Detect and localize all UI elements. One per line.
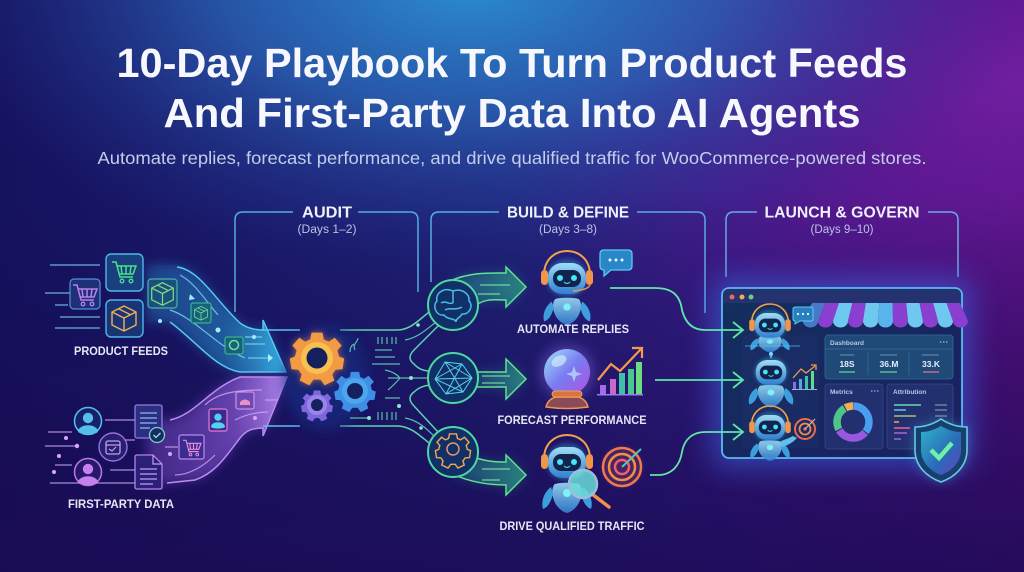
green flow arrow: bottom [452,455,526,495]
product feeds flow arrow [45,265,286,372]
icon: window growth chart [792,365,817,390]
icon: small tile [225,337,243,354]
robot: window middle [749,352,793,408]
panel: metrics donut [825,384,883,449]
phase bracket: audit [235,204,418,312]
icon: user cyan [74,408,102,434]
panel: dashboard metrics: 36.M [880,359,898,369]
icon: chat bubble [600,250,632,276]
phase bracket: audit: AUDIT [302,204,352,222]
icon: purple cart [70,279,100,309]
connector lines: hub rails and branches [263,310,438,446]
icon tiles: first-party data [74,392,254,489]
icon: gear circle [428,427,478,477]
connector arrow: forecast to dashboard [655,372,743,388]
green flow arrow: middle [476,359,526,399]
icon tiles: product feeds [70,254,243,354]
label: drive qualified traffic: DRIVE QUALIFIED TRAFFIC [500,521,644,533]
panel: attribution bars: Attribution [893,389,926,396]
first-party data flow arrow [45,377,287,483]
label: forecast performance: FORECAST PERFORMANCE [498,415,647,427]
icon: document with check [135,405,164,442]
panel: metrics donut: Metrics [830,389,853,396]
panel: dashboard metrics: 18S [839,359,855,369]
icon: network circle [428,353,478,403]
icon: orange gear [290,333,344,385]
connector arrow: traffic to dashboard [650,424,743,475]
icon: small box [191,303,211,323]
icon: storefront awning [803,303,968,328]
connector arrow: replies to dashboard [610,288,743,338]
robot: window top [745,304,800,352]
icon: image tile [236,392,254,409]
icon: window target [795,419,815,439]
robot: automate replies [541,250,632,325]
green flow arrow: top [450,267,526,307]
subtitle: Automate replies, forecast performance, and drive qualified traffic for WooCommerce-powered stores. [98,148,926,168]
icon: chat bubble in window [793,307,813,324]
title: 10-Day Playbook To Turn Product Feeds [116,40,908,86]
icon: user pink [74,458,102,486]
robot: window bottom [749,406,797,461]
icon: target [602,447,642,487]
phase bracket: build and define: BUILD & DEFINE [507,204,629,222]
label: product feeds: PRODUCT FEEDS [74,346,168,358]
panel: dashboard window [722,288,962,461]
dashboard window glow [712,278,972,468]
icon: calendar [99,433,127,461]
panel: dashboard metrics: 33.K [922,359,941,369]
window dots [730,294,754,300]
panel: dashboard metrics [825,335,953,379]
circuit traces [350,322,436,438]
icon: growth chart [597,348,643,396]
phase bracket: launch and govern: LAUNCH & GOVERN [764,204,920,222]
icon: orange box [106,300,143,337]
phase bracket: audit: (Days 1–2) [298,224,357,236]
label: automate replies: AUTOMATE REPLIES [517,324,629,336]
phase bracket: launch and govern: (Days 9–10) [810,224,874,236]
icon: crystal ball [540,345,594,408]
icon: profile tile [209,409,227,431]
icon: green box [148,279,177,308]
panel: attribution bars [887,384,953,449]
phase bracket: build and define [431,204,705,313]
icon: document checklist [135,455,162,489]
title: And First-Party Data Into AI Agents [164,90,860,136]
hub glow [283,326,367,430]
label: first-party data: FIRST-PARTY DATA [68,499,174,511]
title [116,40,908,136]
icon: green cart [106,254,143,291]
phase bracket: build and define: (Days 3–8) [539,224,597,236]
icon: brain circle [428,280,478,330]
icon: blue gear [334,372,376,412]
icon: magnifier [569,470,609,507]
panel: robots column [742,335,819,448]
icon: cart tile [179,435,204,459]
robot: drive qualified traffic [541,435,642,513]
icon: security shield [915,419,967,482]
icon: purple gear [301,390,333,422]
panel: dashboard metrics: Dashboard [830,340,864,347]
phase bracket: launch and govern [726,204,958,277]
